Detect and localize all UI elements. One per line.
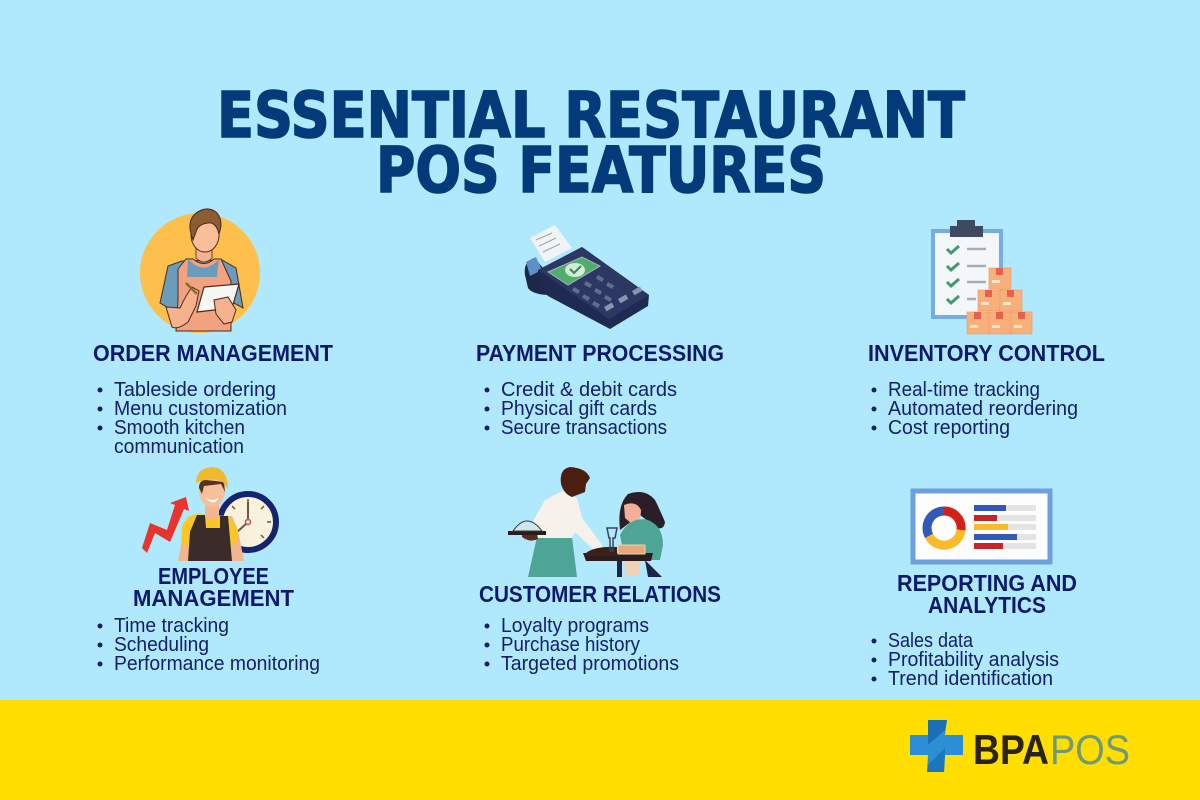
heading: inventory control: INVENTORY CONTROL	[868, 340, 1105, 366]
logo: BPA POS	[910, 720, 1130, 773]
heading: employee management: EMPLOYEE	[158, 563, 269, 589]
title: POS FEATURES	[376, 134, 826, 207]
footer band	[0, 700, 1200, 800]
list: order management features: Smooth kitchen	[114, 417, 245, 439]
heading: customer relations: CUSTOMER RELATIONS	[479, 581, 721, 607]
list: employee management features	[98, 615, 320, 675]
icon: waiter serving a customer	[508, 467, 665, 577]
list: inventory control features: Cost reporting	[888, 417, 1010, 439]
list: order management features: Menu customization	[114, 398, 287, 420]
list: order management features: Tableside ordering	[114, 379, 276, 401]
panel: payment processing	[476, 225, 724, 439]
list: payment processing features: Secure transactions	[501, 417, 667, 439]
icon: worker, clock and growth arrow	[142, 467, 276, 561]
list: customer relations features: Loyalty programs	[501, 615, 649, 637]
logo: BPA POS: POS	[1050, 726, 1130, 773]
list: customer relations features: Targeted promotions	[501, 653, 679, 675]
list: reporting and analytics features: Trend identification	[888, 668, 1053, 690]
panel: employee management	[98, 467, 320, 675]
heading: employee management	[133, 563, 295, 611]
title: ESSENTIAL RESTAURANT	[217, 79, 965, 152]
heading: reporting and analytics: REPORTING AND	[897, 570, 1077, 596]
list: customer relations features: Purchase history	[501, 634, 640, 656]
list: reporting and analytics features: Sales data	[888, 630, 974, 652]
panel: customer relations	[479, 467, 721, 675]
list: payment processing features: Credit & debit cards	[501, 379, 677, 401]
list: inventory control features	[872, 379, 1078, 439]
list: order management features: communication	[114, 436, 244, 458]
panel: order management	[93, 209, 334, 458]
logo: BPA POS: BPA	[973, 726, 1049, 773]
list: reporting and analytics features: Profitability analysis	[888, 649, 1059, 671]
list: inventory control features: Automated reordering	[888, 398, 1078, 420]
icon: medical cross	[910, 720, 963, 772]
list: inventory control features: Real-time tracking	[888, 379, 1040, 401]
list: employee management features: Performance monitoring	[114, 653, 320, 675]
list: payment processing features: Physical gift cards	[501, 398, 657, 420]
heading: employee management: MANAGEMENT	[133, 585, 295, 611]
list: employee management features: Scheduling	[114, 634, 209, 656]
icon: analytics dashboard	[913, 491, 1050, 562]
list: reporting and analytics features	[872, 630, 1059, 690]
list: employee management features: Time tracking	[114, 615, 229, 637]
panel: reporting and analytics	[872, 491, 1077, 690]
panel: inventory control	[868, 220, 1105, 439]
heading: order management: ORDER MANAGEMENT	[93, 340, 334, 366]
list: order management features	[98, 379, 287, 458]
title	[217, 79, 965, 207]
icon: waiter taking an order	[140, 209, 260, 333]
list: payment processing features	[484, 379, 677, 439]
heading: reporting and analytics: ANALYTICS	[928, 592, 1046, 618]
heading: payment processing: PAYMENT PROCESSING	[476, 340, 724, 366]
icon: clipboard and boxes	[933, 220, 1032, 334]
list: customer relations features	[484, 615, 679, 675]
heading: reporting and analytics	[897, 570, 1077, 618]
icon: card payment terminal	[525, 225, 649, 329]
